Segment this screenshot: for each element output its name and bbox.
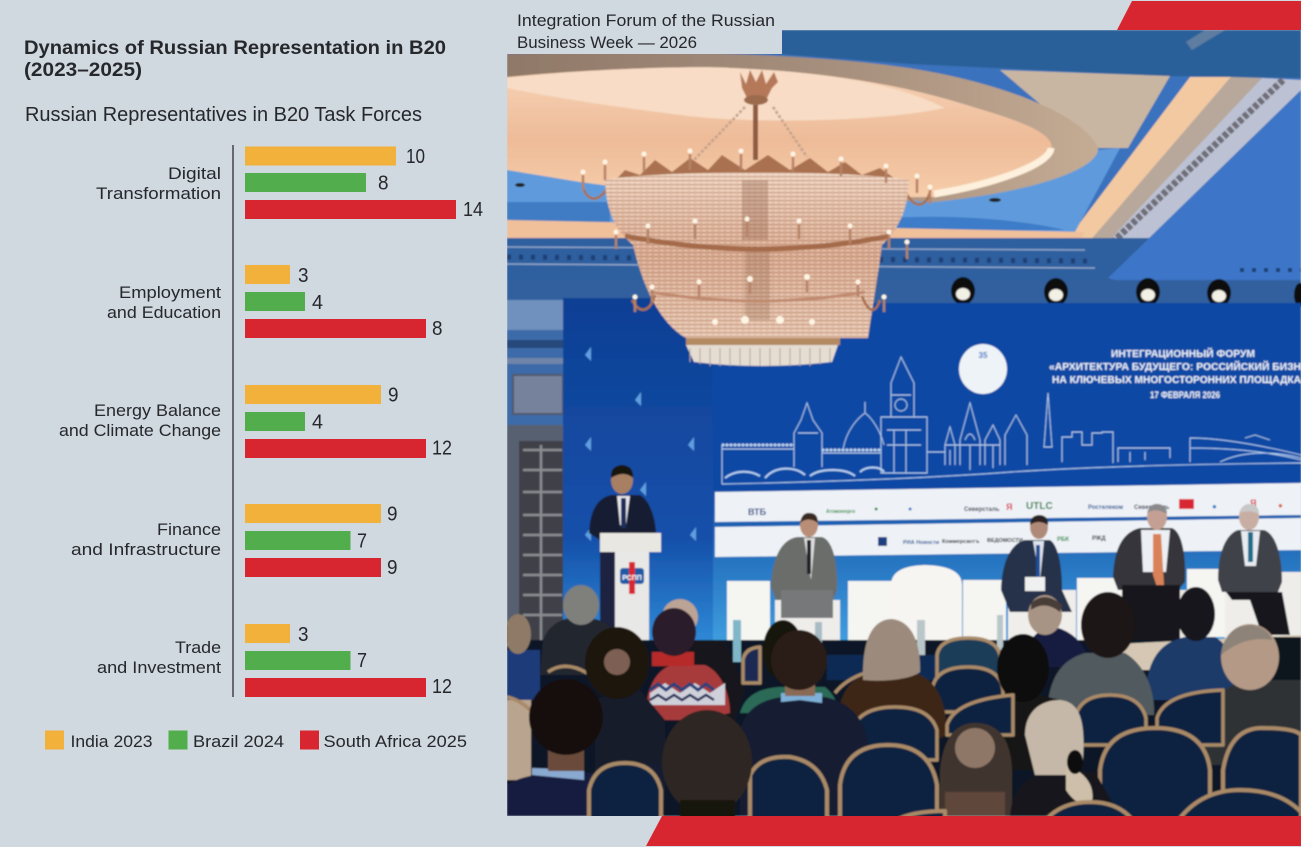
panelist 2 xyxy=(1001,515,1072,612)
audience xyxy=(505,585,1301,822)
group: Energy Balance and Climate Change: 4 xyxy=(312,410,323,434)
group: Trade and Investment: 7 xyxy=(357,649,367,672)
group: Finance and Infrastructure: Finance xyxy=(157,520,221,539)
chairs third row xyxy=(507,690,1223,760)
sponsor logos: Я xyxy=(1006,502,1012,512)
sponsor logos: Атомэнерго xyxy=(826,509,855,515)
podium emblem xyxy=(620,562,644,594)
screen left panel marks xyxy=(585,347,696,541)
sponsor logos: Северсталь xyxy=(964,507,1000,513)
row two people xyxy=(1028,587,1236,715)
group: Finance and Infrastructure xyxy=(71,502,398,579)
panelists xyxy=(771,504,1290,640)
ceiling xyxy=(507,30,1301,310)
sponsor logos: РБК xyxy=(1057,537,1069,543)
group: Digital Transformation: 14 xyxy=(463,198,483,221)
front row people xyxy=(507,630,868,816)
title: Dynamics of Russian Representation in B20 xyxy=(24,37,446,59)
front chairs xyxy=(589,728,1301,822)
candles xyxy=(583,154,930,312)
bald man grey jacket xyxy=(1206,623,1301,766)
chart subtitle: Russian Representatives in B20 Task Forces xyxy=(25,104,422,126)
forum title on screen: ИНТЕГРАЦИОННЫЙ ФОРУМ xyxy=(1111,347,1255,360)
forum title on screen: 17 ФЕВРАЛЯ 2026 xyxy=(1150,390,1220,400)
group: Employment and Education: 3 xyxy=(298,264,308,287)
group: Employment and Education xyxy=(107,264,442,340)
sponsor logos: ВЕДОМОСТИ xyxy=(987,538,1023,544)
sponsor logos: РИА Новости xyxy=(903,540,939,546)
foreground chair tops xyxy=(893,790,1301,822)
panelist 1 xyxy=(771,513,837,618)
sponsor logos: ● xyxy=(1278,501,1283,510)
balding man xyxy=(585,627,665,775)
group: Energy Balance and Climate Change: Energy Balance xyxy=(94,401,221,420)
chairs back xyxy=(743,638,1000,683)
sponsor logos: РЖД xyxy=(1092,536,1106,542)
photo caption xyxy=(507,0,782,54)
group: Energy Balance and Climate Change: and Climate Change xyxy=(59,421,221,440)
back row xyxy=(505,585,1003,720)
group: Employment and Education: Employment xyxy=(119,283,221,302)
group: Digital Transformation xyxy=(96,145,483,221)
stage floor and table xyxy=(507,634,1301,816)
balding man foreground xyxy=(940,723,1012,816)
group: Finance and Infrastructure: 7 xyxy=(357,530,367,552)
title xyxy=(24,37,446,81)
forum emblem xyxy=(959,344,1007,394)
sponsor logos: Коммерсантъ xyxy=(942,539,979,545)
speaker at podium xyxy=(589,465,661,642)
group: Finance and Infrastructure: 9 xyxy=(387,556,398,579)
blonde woman with ponytail xyxy=(1010,700,1120,816)
sponsor logos: ● xyxy=(874,506,878,513)
group: Finance and Infrastructure: 9 xyxy=(387,502,398,526)
dark haired woman xyxy=(995,634,1060,770)
panelist 4 xyxy=(1218,504,1290,635)
blonde woman brown jacket xyxy=(837,619,947,740)
sponsor logos: UTLC xyxy=(1026,501,1053,512)
front heads xyxy=(662,700,1120,820)
sponsor logos: ● xyxy=(908,506,912,513)
group: Digital Transformation: Digital xyxy=(168,164,221,183)
group: Trade and Investment: and Investment xyxy=(97,658,221,677)
title: (2023–2025) xyxy=(24,59,142,81)
chandelier xyxy=(580,70,932,366)
patterned sweater person xyxy=(646,608,730,720)
group: Digital Transformation: Transformation xyxy=(96,184,221,203)
emblem number: 35 xyxy=(979,351,988,360)
group: Trade and Investment: 12 xyxy=(432,675,452,698)
decorative red corner top right xyxy=(1117,1,1301,30)
bar chart xyxy=(59,145,483,698)
sponsor logos: ВТБ xyxy=(748,507,767,517)
seated audience middle row xyxy=(507,608,1301,780)
stage lights xyxy=(951,277,1301,307)
Moscow skyline line drawing xyxy=(722,357,1301,484)
group: Employment and Education: 8 xyxy=(432,317,442,340)
group: Digital Transformation: 8 xyxy=(378,172,388,194)
legend xyxy=(45,730,467,751)
group: Energy Balance and Climate Change xyxy=(59,384,452,460)
conference screen xyxy=(563,298,1301,645)
sponsor logos xyxy=(748,498,1283,546)
group: Energy Balance and Climate Change: 9 xyxy=(388,384,398,406)
man in black hair front left xyxy=(507,679,603,816)
white name boards and chairs xyxy=(727,565,1301,645)
legend: India 2023 xyxy=(70,733,152,751)
sponsor strips xyxy=(715,483,1301,557)
chairs second row xyxy=(548,666,1003,712)
legend: South Africa 2025 xyxy=(324,733,467,751)
legend: Brazil 2024 xyxy=(193,733,284,751)
group: Employment and Education: 4 xyxy=(312,291,323,314)
caption line 1: Integration Forum of the Russian xyxy=(517,11,775,30)
sponsor logos: Ростелеком xyxy=(1088,505,1124,511)
man navy jacket with blue collar xyxy=(740,630,868,816)
decorative red band bottom xyxy=(646,816,1301,846)
panelist 3 xyxy=(1113,504,1185,640)
group: Trade and Investment: Trade xyxy=(175,638,221,657)
sponsor logos: Я xyxy=(1250,498,1256,508)
group: Finance and Infrastructure: and Infrastructure xyxy=(71,540,221,559)
group: Trade and Investment: 3 xyxy=(298,623,308,646)
caption line 2: Business Week — 2026 xyxy=(517,33,697,52)
photo: Integration Forum conference hall xyxy=(505,30,1301,822)
podium emblem: РСПП xyxy=(622,575,642,582)
forum title on screen xyxy=(1049,347,1301,400)
sponsor logos: ● xyxy=(1212,502,1217,511)
forum title on screen: НА КЛЮЧЕВЫХ МНОГОСТОРОННИХ ПЛОЩАДКА xyxy=(1052,374,1301,386)
dark hair man foreground xyxy=(662,710,752,820)
woman in green top xyxy=(740,620,838,713)
group: Energy Balance and Climate Change: 12 xyxy=(432,436,452,460)
man in dark navy between rows xyxy=(658,774,666,800)
forum title on screen: «АРХИТЕКТУРА БУДУЩЕГО: РОССИЙСКИЙ БИЗН xyxy=(1049,360,1301,373)
group: Employment and Education: and Education xyxy=(107,303,221,322)
group: Digital Transformation: 10 xyxy=(406,145,425,168)
wall and door xyxy=(507,300,563,645)
sponsor logos: Северсталь xyxy=(1134,505,1170,511)
group: Trade and Investment xyxy=(97,623,452,698)
